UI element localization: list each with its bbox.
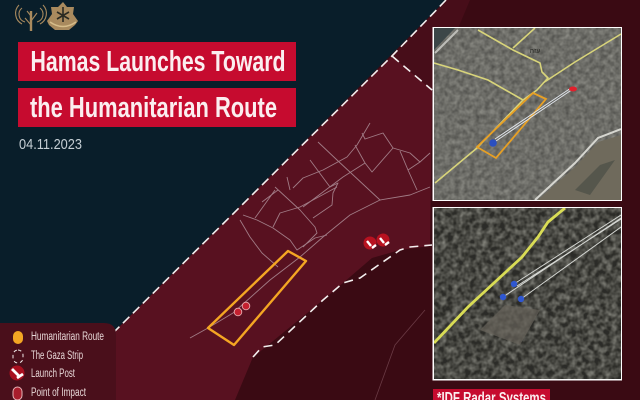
border: coastline dashed line: [113, 0, 446, 333]
legend: point of impact: Point of Impact: [31, 387, 87, 399]
yellow roads: [434, 28, 621, 183]
yellow road: [434, 208, 565, 343]
city name: עזה: [530, 48, 540, 55]
icons: launch posts on map: [364, 234, 390, 250]
title line 1: Hamas Launches Toward: [30, 46, 286, 78]
roads: [190, 123, 430, 338]
map: the Gaza Strip: [90, 0, 470, 400]
white roads: [535, 129, 621, 200]
radar point marker: [489, 139, 497, 147]
legend: the Gaza Strip: The Gaza Strip: [31, 350, 83, 362]
icons: points of impact on map: [234, 302, 250, 316]
launch trajectories: [503, 215, 621, 299]
title: [18, 42, 296, 127]
title line 2: [18, 88, 296, 127]
legend: launch post: Launch Post: [31, 368, 76, 380]
inset: radar image overview: [432, 27, 622, 201]
legend: [0, 323, 116, 400]
icon: IDF emblem: [47, 2, 78, 30]
legend: humanitarian route: Humanitarian Route: [31, 331, 104, 343]
date: 04.11.2023: [19, 136, 82, 153]
border: eastern dashed line: [253, 56, 432, 357]
launch trajectories: [493, 88, 573, 143]
icon: intelligence corps emblem: [16, 5, 46, 31]
launch post marker: [569, 86, 577, 92]
title line 1: [18, 42, 296, 81]
title line 2: the Humanitarian Route: [30, 92, 277, 124]
radar point markers: [500, 281, 524, 302]
humanitarian route rectangle: [208, 251, 306, 345]
logos: [16, 2, 78, 31]
caption: IDF Radar Systems: [433, 389, 550, 400]
route rectangle: [477, 93, 546, 158]
inset: radar image close-up: [432, 207, 622, 380]
